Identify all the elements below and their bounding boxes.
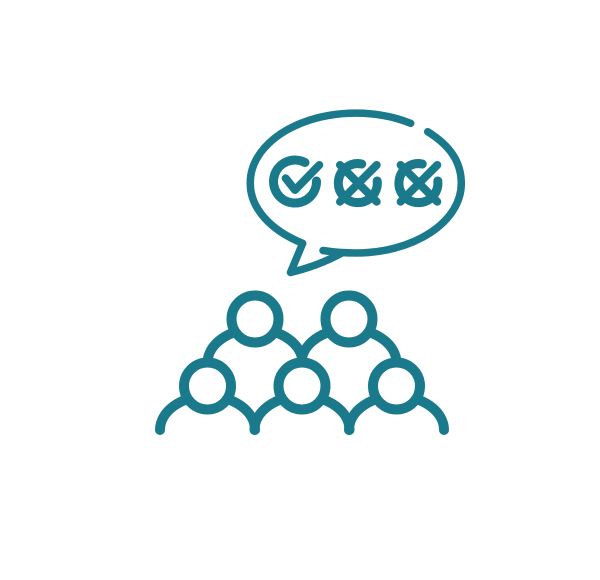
icon: second cross vote <box>399 164 438 203</box>
icon: check mark vote <box>274 160 319 203</box>
icon: first cross vote <box>338 164 377 203</box>
icon: speech bubble <box>250 113 461 272</box>
icon: back row of people <box>208 296 396 363</box>
icon: front row of people <box>160 362 444 430</box>
